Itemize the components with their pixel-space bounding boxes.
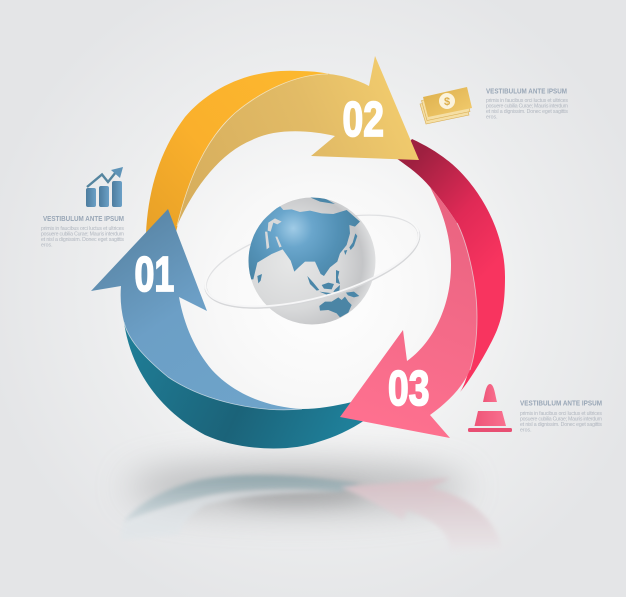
arrow 02 [177,56,419,226]
icon: banknotes: $ [444,96,450,108]
number 01: 01 [134,248,174,302]
icon: banknotes [420,87,472,124]
text block: top right: VESTIBULUM ANTE IPSUM [486,86,567,96]
globe [240,197,376,324]
globe sphere [248,198,376,324]
arrow 03 [340,187,477,438]
arrow 01 [91,209,302,410]
text block: top right: primis in faucibus orci luctus et ultrices [486,98,568,104]
text block: left: posuere cubilia Curae; Mauris interdum [41,232,124,238]
text block: bottom right: eros. [520,428,532,434]
text block: top right: posuere cubilia Curae; Mauris interdum [486,104,568,110]
text block: left [41,214,124,248]
text block: top right: et nisl a dignissim. Donec eget sagittis [486,109,568,115]
text block: bottom right [520,398,602,434]
text block: bottom right: et nisl a dignissim. Donec eget sagittis [520,422,602,428]
floor shadow and reflection [120,463,503,552]
text block: left: primis in faucibus orci luctus et ultrices [41,226,124,232]
text block: top right [486,86,568,120]
panel: back ribbon orange [146,71,330,234]
orbit ring front [204,232,420,309]
number 03: 03 [388,362,429,416]
text block: bottom right: posuere cubilia Curae; Mauris interdum [520,416,602,422]
text block: left: VESTIBULUM ANTE IPSUM [43,214,124,223]
text block: bottom right: VESTIBULUM ANTE IPSUM [520,398,602,408]
orbit ring back [196,195,428,326]
text block: left: eros. [41,242,53,248]
number 02: 02 [342,93,384,147]
icon: traffic cone [468,384,512,432]
panel: back ribbon red [396,139,505,392]
globe continents [240,197,360,317]
text block: bottom right: primis in faucibus orci luctus et ultrices [520,411,602,417]
text block: left: et nisl a dignissim. Donec eget sagittis [41,237,124,243]
panel: back ribbon teal [124,322,365,448]
icon: bar chart with arrow [86,167,123,207]
text block: top right: eros. [486,114,498,120]
